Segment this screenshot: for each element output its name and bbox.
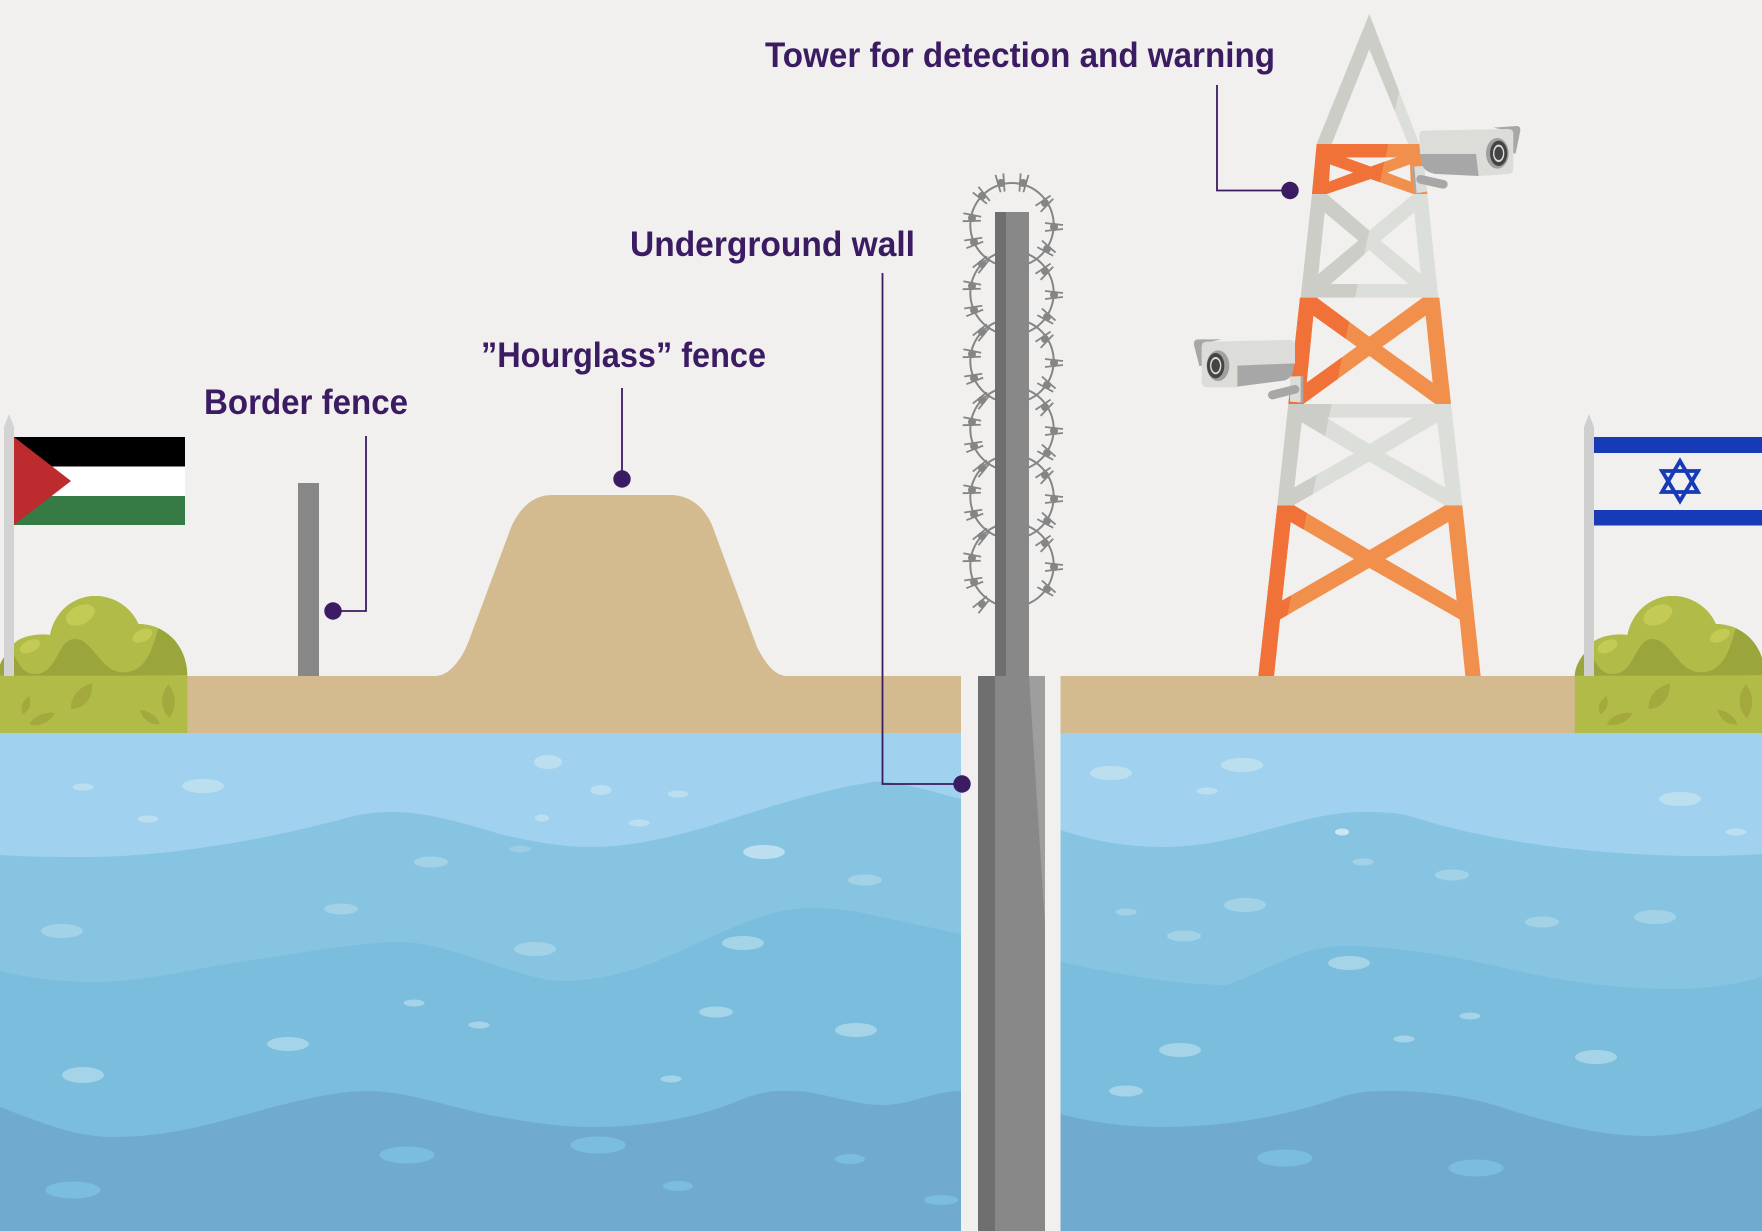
- callout: underground wall: Underground wall: [630, 225, 915, 264]
- panel: left water layers: [0, 733, 961, 1231]
- callout: hourglass fence: ”Hourglass” fence: [481, 336, 766, 375]
- icon: Israeli flag: [1584, 414, 1762, 676]
- callout: hourglass fence: [481, 336, 766, 488]
- callout: tower for detection and warning: Tower for detection and warning: [765, 36, 1275, 75]
- tower: [1258, 14, 1481, 676]
- callout: underground wall: [630, 225, 971, 793]
- ground (right): [1060, 676, 1762, 733]
- ground with hourglass fence mound (left): [0, 495, 961, 733]
- callout: border fence: Border fence: [204, 383, 408, 422]
- callout: tower for detection and warning: [765, 36, 1299, 199]
- icon: Palestinian flag: [4, 414, 185, 676]
- border fence post: [298, 483, 319, 676]
- icon: bush right: [1575, 596, 1762, 733]
- underground wall and post: [978, 212, 1045, 1231]
- panel: right water layers: [1060, 733, 1762, 1231]
- callout: border fence: [204, 383, 408, 620]
- icon: camera right: [1412, 126, 1520, 193]
- icon: camera left: [1194, 339, 1303, 403]
- icon: bush left: [0, 596, 187, 733]
- barbed wire coil: [963, 173, 1063, 613]
